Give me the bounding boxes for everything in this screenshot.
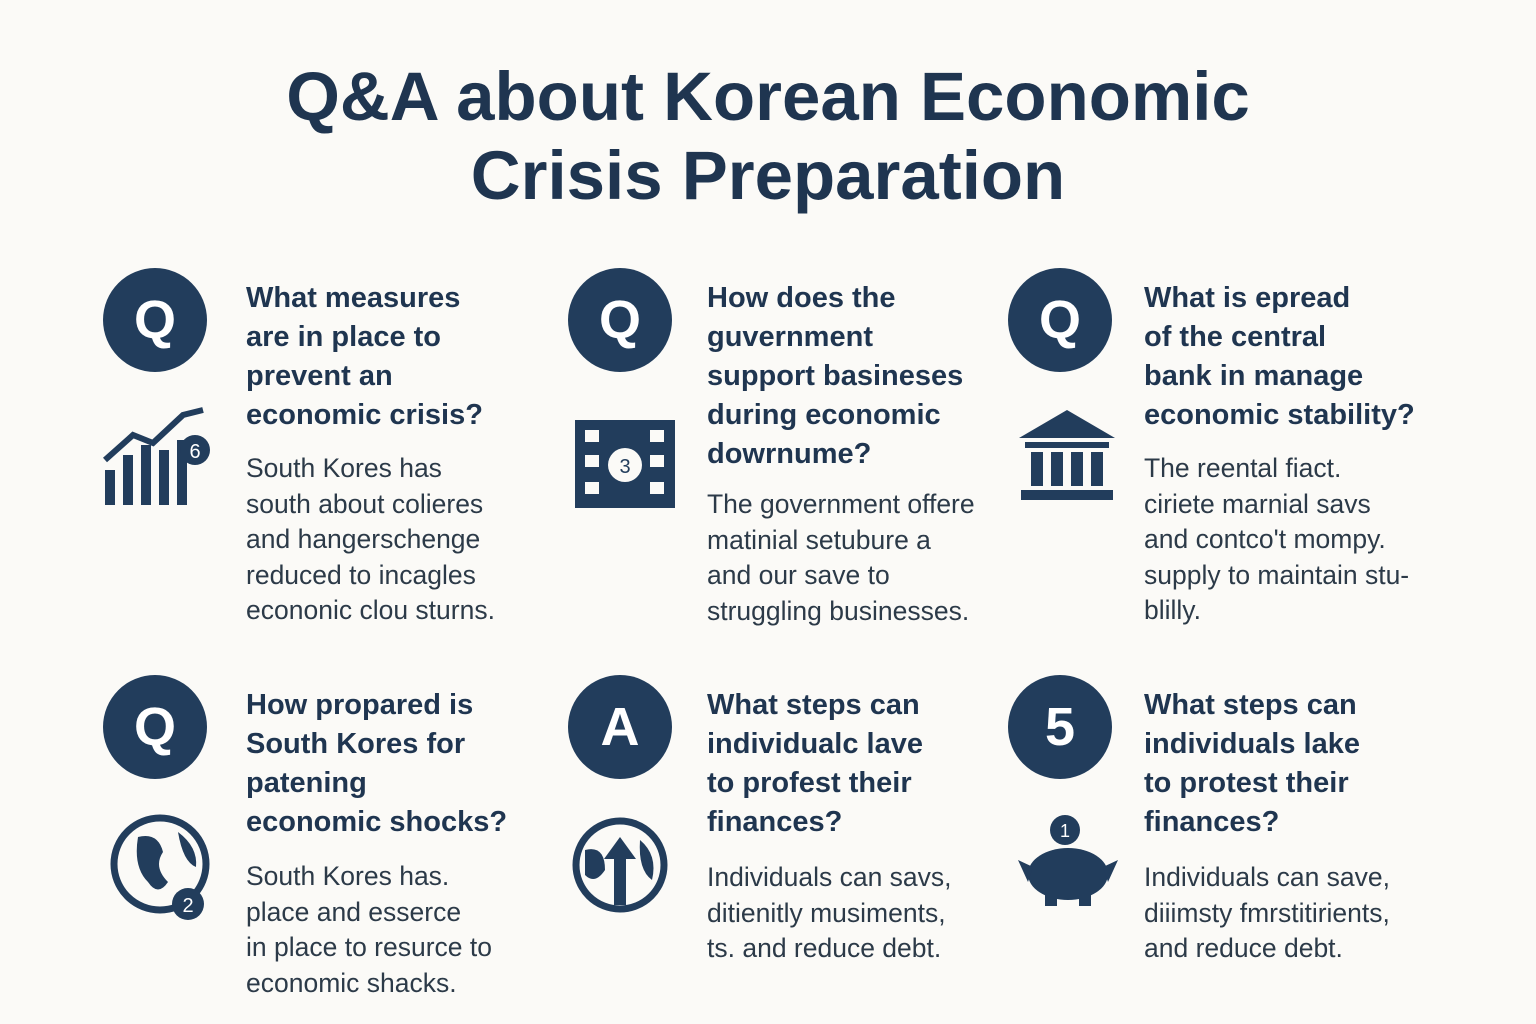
icon: Q circle: [103, 268, 207, 372]
question: support basineses: [707, 360, 963, 392]
icon: building: 3: [619, 456, 631, 478]
icon: building: [575, 420, 675, 508]
answer: in place to resurce to: [246, 932, 492, 962]
icon: Q circle: Q: [599, 290, 641, 350]
icon: Q circle: Q: [134, 697, 176, 757]
answer: econonic clou sturns.: [246, 595, 495, 625]
icon: bar chart: [103, 407, 210, 505]
title: [286, 58, 1250, 214]
question: of the central: [1144, 321, 1326, 353]
answer: and contco't mompy.: [1144, 524, 1386, 554]
question: What steps can: [1144, 689, 1357, 721]
answer: The reental fiact.: [1144, 453, 1341, 483]
answer: [707, 862, 952, 963]
answer: South Kores has: [246, 453, 442, 483]
answer: and reduce debt.: [1144, 933, 1343, 963]
question: How propared is: [246, 689, 473, 721]
answer: [1144, 453, 1409, 625]
answer: and hangerschenge: [246, 524, 480, 554]
answer: ditienitly musiments,: [707, 898, 946, 928]
icon: bank: [1019, 410, 1115, 500]
question: during economic: [707, 399, 941, 431]
question: economic shocks?: [246, 806, 507, 838]
question: dowrnume?: [707, 438, 871, 470]
answer: Individuals can savs,: [707, 862, 952, 892]
icon: A circle: A: [600, 697, 640, 757]
question: [246, 689, 507, 838]
answer: supply to maintain stu-: [1144, 560, 1409, 590]
question: to profest their: [707, 767, 912, 799]
answer: matinial setubure a: [707, 524, 931, 554]
panel: prepared for shocks: [103, 675, 507, 998]
answer: struggling businesses.: [707, 596, 969, 626]
icon: globe: 2: [182, 895, 194, 917]
icon: globe arrow: [572, 818, 668, 912]
answer: ts. and reduce debt.: [707, 933, 941, 963]
icon: Q circle: Q: [1039, 290, 1081, 350]
question: finances?: [707, 806, 842, 838]
answer: [246, 453, 495, 625]
answer: reduced to incagles: [246, 560, 476, 590]
panel: individuals steps 5: [1008, 675, 1390, 963]
question: [707, 282, 963, 470]
answer: [707, 489, 975, 626]
icon: globe: [110, 814, 210, 920]
panel: individuals steps A: [568, 675, 952, 963]
question: How does the: [707, 282, 896, 314]
question: economic crisis?: [246, 399, 483, 431]
panel: central bank: [1008, 268, 1415, 625]
question: guvernment: [707, 321, 873, 353]
question: bank in manage: [1144, 360, 1363, 392]
icon: Q circle: [1008, 268, 1112, 372]
question: [246, 282, 483, 431]
answer: diiimsty fmrstitirients,: [1144, 898, 1390, 928]
icon: Q circle: [568, 268, 672, 372]
icon: Q circle: Q: [134, 290, 176, 350]
title: Q&A about Korean Economic: [286, 58, 1250, 135]
question: are in place to: [246, 321, 441, 353]
question: prevent an: [246, 360, 393, 392]
icon: piggy bank: [1018, 815, 1118, 906]
question: economic stability?: [1144, 399, 1415, 431]
answer: and our save to: [707, 560, 890, 590]
question: What steps can: [707, 689, 920, 721]
question: individuals lake: [1144, 728, 1360, 760]
answer: place and esserce: [246, 896, 461, 926]
title: Crisis Preparation: [471, 137, 1065, 214]
answer: [246, 861, 492, 998]
question: individualc lave: [707, 728, 923, 760]
question: [1144, 282, 1415, 431]
icon: A circle: [568, 675, 672, 779]
panel: prevent crisis: [103, 268, 495, 625]
icon: piggy bank: 1: [1060, 821, 1070, 841]
question: to protest their: [1144, 767, 1349, 799]
question: [707, 689, 923, 838]
answer: south about colieres: [246, 488, 483, 518]
icon: 5 circle: [1008, 675, 1112, 779]
icon: 5 circle: 5: [1045, 697, 1075, 757]
answer: economic shacks.: [246, 968, 457, 998]
answer: [1144, 862, 1390, 963]
icon: bar chart: 6: [189, 441, 201, 463]
icon: Q circle: [103, 675, 207, 779]
question: What is epread: [1144, 282, 1350, 314]
panel: support businesses: [568, 268, 975, 626]
question: finances?: [1144, 806, 1279, 838]
question: patening: [246, 767, 367, 799]
question: What measures: [246, 282, 460, 314]
answer: Individuals can save,: [1144, 862, 1390, 892]
question: South Kores for: [246, 728, 465, 760]
answer: South Kores has.: [246, 861, 449, 891]
answer: ciriete marnial savs: [1144, 488, 1371, 518]
answer: The government offere: [707, 489, 975, 519]
answer: blilly.: [1144, 595, 1201, 625]
question: [1144, 689, 1360, 838]
